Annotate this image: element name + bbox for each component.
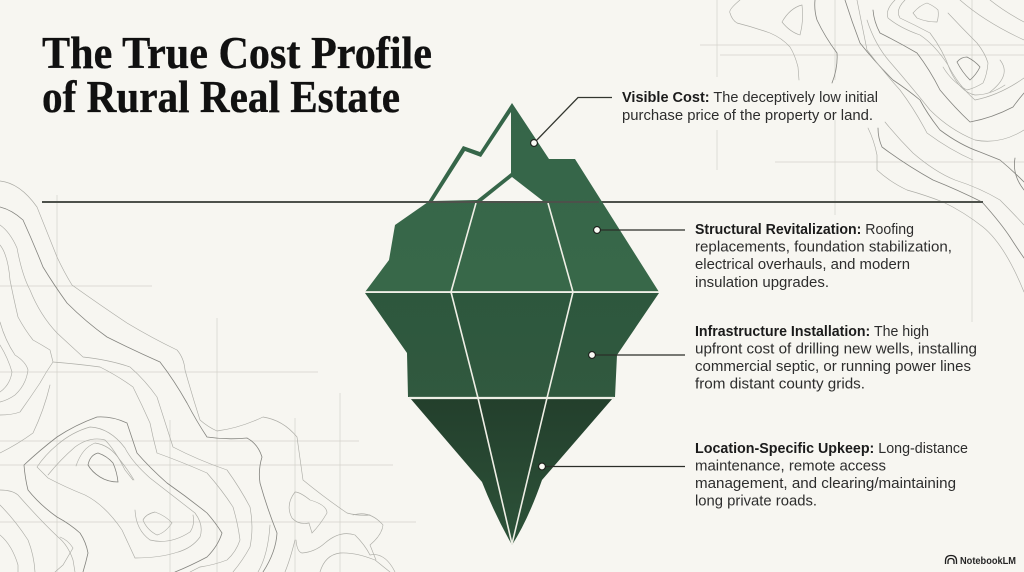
callout: location-specific upkeep [539,441,968,510]
callout: location-specific upkeep: maintenance, remote access [695,458,886,474]
callout: infrastructure installation: Infrastructure Installation: The high [695,324,929,340]
horizon line [42,201,983,203]
callout: visible cost: purchase price of the property or land. [622,108,873,124]
callout: location-specific upkeep: management, and clearing/maintaining [695,476,956,492]
callout: location-specific upkeep: Location-Specific Upkeep: Long-distance [695,441,968,457]
watermark: NotebookLM: NotebookLM [960,555,1016,567]
callout: visible cost [531,90,878,146]
title: of Rural Real Estate [42,71,400,122]
callout: structural revitalization: replacements, foundation stabilization, [695,240,952,256]
callout: infrastructure installation: upfront cost of drilling new wells, installing [695,342,977,358]
callout: structural revitalization: insulation upgrades. [695,275,829,291]
callout: structural revitalization: Structural Revitalization: Roofing [695,222,914,238]
iceberg diagram [365,103,659,545]
icon: NotebookLM logo [946,556,956,564]
callout: infrastructure installation [589,324,977,392]
iceberg tier: visible tip and structural layer [365,103,659,292]
callout: infrastructure installation: from distant county grids. [695,376,865,392]
callout: structural revitalization: electrical overhauls, and modern [695,257,910,273]
title [42,27,432,122]
callout: location-specific upkeep: long private roads. [695,494,817,510]
callout: structural revitalization [594,222,952,291]
callout: visible cost: Visible Cost: The deceptively low initial [622,90,878,106]
iceberg tier: upkeep layer [410,398,613,545]
iceberg tier: infrastructure layer [365,293,659,397]
title: The True Cost Profile [42,27,432,78]
callout: infrastructure installation: commercial septic, or running power lines [695,359,971,375]
